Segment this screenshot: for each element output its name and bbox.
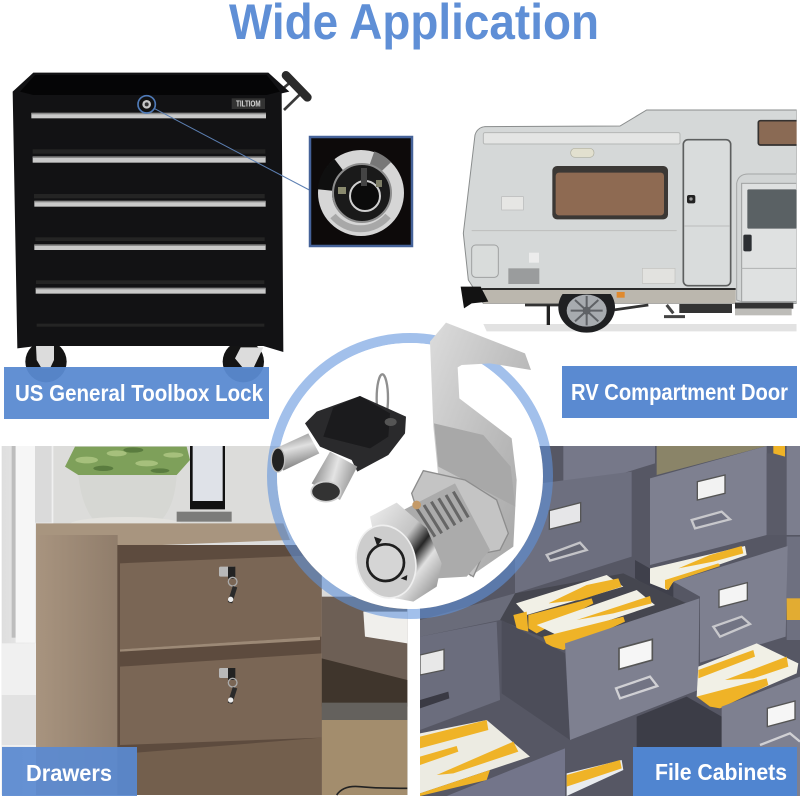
- cabinet front: [117, 545, 322, 795]
- phone on dock: [177, 446, 232, 522]
- plant and pot: [65, 447, 190, 532]
- cabinet background: [420, 446, 800, 796]
- RV cab: [737, 174, 797, 302]
- white edge: [797, 90, 800, 343]
- bed and floor: [322, 597, 407, 795]
- open drawer center with folders: [500, 573, 699, 740]
- lock face: [348, 519, 424, 605]
- key barrel right: [311, 452, 357, 502]
- cabinet top: [36, 523, 290, 547]
- label: RV Compartment Door: [562, 366, 797, 418]
- room background: [2, 446, 407, 795]
- black key head: [305, 396, 406, 472]
- lower skirt: [482, 289, 793, 325]
- icon: toolbox handle: [279, 75, 307, 110]
- open drawer upper right: [635, 546, 788, 663]
- closed drawer right: [650, 446, 800, 640]
- icon: drawer lock and key top: [219, 567, 237, 603]
- brand plate: TILTIOM: [236, 100, 261, 109]
- blue ring: [272, 338, 548, 614]
- upper window: [758, 121, 798, 145]
- RV wheel: [558, 294, 615, 333]
- roof light: [571, 148, 594, 157]
- ground shadow: [483, 324, 797, 331]
- label: US General Toolbox Lock: US General Toolbox Lock: [15, 380, 263, 406]
- open drawer lower middle: [567, 760, 623, 796]
- lock cam bracket: [430, 323, 531, 577]
- side panels and vents: [472, 197, 677, 284]
- folders top strip: [657, 446, 767, 475]
- open drawer lower left: [420, 720, 565, 796]
- cabinet side: [36, 535, 118, 795]
- closed drawer left: [515, 472, 632, 593]
- panel: file cabinets photo: [420, 446, 800, 796]
- label: File Cabinets: [633, 747, 797, 796]
- icon: drawer lock and key bottom: [219, 668, 237, 703]
- threaded cylinder: [403, 483, 490, 578]
- label: File Cabinets: File Cabinets: [655, 759, 787, 785]
- toolbox body: [13, 73, 289, 352]
- lock head: [370, 503, 442, 602]
- lock and keys: [271, 323, 531, 605]
- panel: RV photo: [460, 110, 797, 333]
- label: US General Toolbox Lock: [4, 367, 269, 419]
- compartment door: [683, 140, 731, 286]
- rear bumper: [461, 287, 488, 308]
- inset: lock close-up: [310, 137, 412, 246]
- toolbox top tray: [20, 75, 280, 95]
- drawer rails: [31, 113, 266, 327]
- panel: product circle: [271, 323, 548, 614]
- label: Drawers: Drawers: [26, 760, 112, 786]
- wheels: [25, 341, 264, 382]
- top row drawer: [563, 446, 655, 480]
- brand plate: [232, 98, 265, 109]
- lock nut: [412, 471, 508, 577]
- label: Drawers: [2, 747, 137, 796]
- RV window: [552, 166, 668, 219]
- key ring: [377, 374, 388, 422]
- panel: toolbox photo: [13, 73, 309, 382]
- awning: [483, 133, 680, 144]
- open drawer lower right: [637, 643, 800, 796]
- panel: drawers photo: [2, 446, 407, 795]
- white circle background: [277, 343, 543, 609]
- key barrel left: [271, 433, 319, 472]
- closed drawer far left: [420, 593, 515, 730]
- RV body: [463, 110, 797, 303]
- icon: lock highlight with leader line: [138, 96, 309, 190]
